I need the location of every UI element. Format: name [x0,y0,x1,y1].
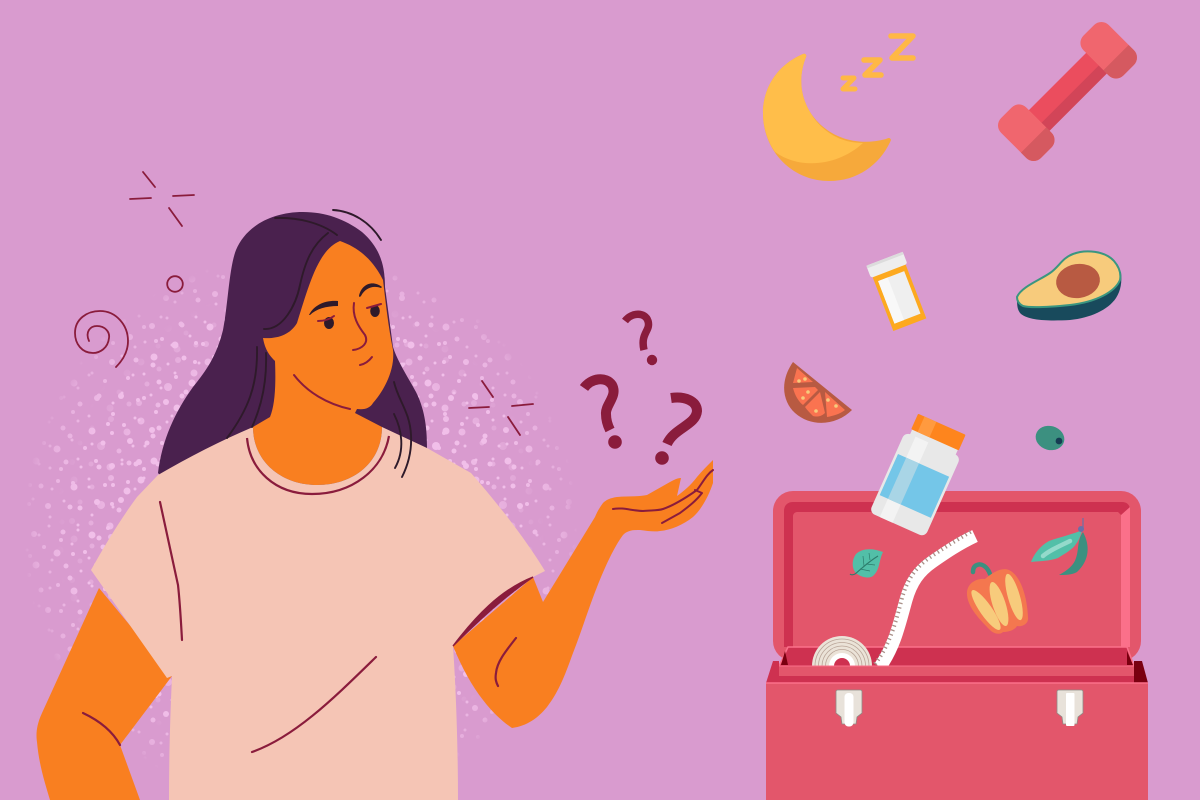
lid inner right bevel [1121,507,1130,647]
question mark left [584,379,622,449]
tape strip [880,536,975,667]
lid inner shadow [784,502,1130,647]
lid [773,491,1141,661]
shirt fold lines [160,502,376,752]
decorative spiral [75,311,128,367]
hair strands [227,210,411,477]
base body [766,683,1148,800]
question mark small [625,314,657,365]
latch right [1057,690,1083,726]
measuring tape [812,530,978,666]
olive [1033,423,1067,453]
sleeve edge line [453,577,533,646]
base back corners [1134,661,1148,683]
eyes [324,305,380,329]
collar line [247,436,389,494]
pill bottle orange [866,252,928,332]
bell pepper [967,564,1028,634]
woman [37,210,713,800]
decorative small circle [167,276,183,292]
speckled dots halo [30,274,571,757]
tray inside [779,647,1134,666]
decorative sparks upper left [130,172,194,226]
supplement bottle [869,412,970,537]
eyelids, nose, mouth, jaw [294,303,381,409]
leaf [850,549,883,578]
tray front [779,666,1134,676]
tray top edge [779,647,1134,666]
hand palm lines [613,470,713,523]
toolbox [766,491,1148,800]
t-shirt [91,427,545,800]
avocado [1017,251,1121,320]
moon with zzz [763,36,913,181]
moon light side [763,54,863,163]
arm crease lines [83,638,516,745]
face and neck [253,241,393,485]
pea pods [1031,518,1088,575]
decorative sparks right of head [469,381,533,435]
grapefruit slice [784,362,852,423]
right arm and hand [453,460,713,728]
tray dark corner left [781,651,788,665]
hair [158,212,440,520]
base rim [766,661,1134,683]
lid inner panel [793,512,1121,647]
tape roll [812,636,872,666]
zzz [843,36,913,89]
moon [763,54,891,181]
tray dark corner right [1127,651,1133,665]
eyebrows [309,283,382,315]
question mark right [655,398,697,465]
latch left [836,690,862,726]
left arm [37,588,172,800]
question marks [584,314,697,465]
dumbbell [994,18,1141,165]
